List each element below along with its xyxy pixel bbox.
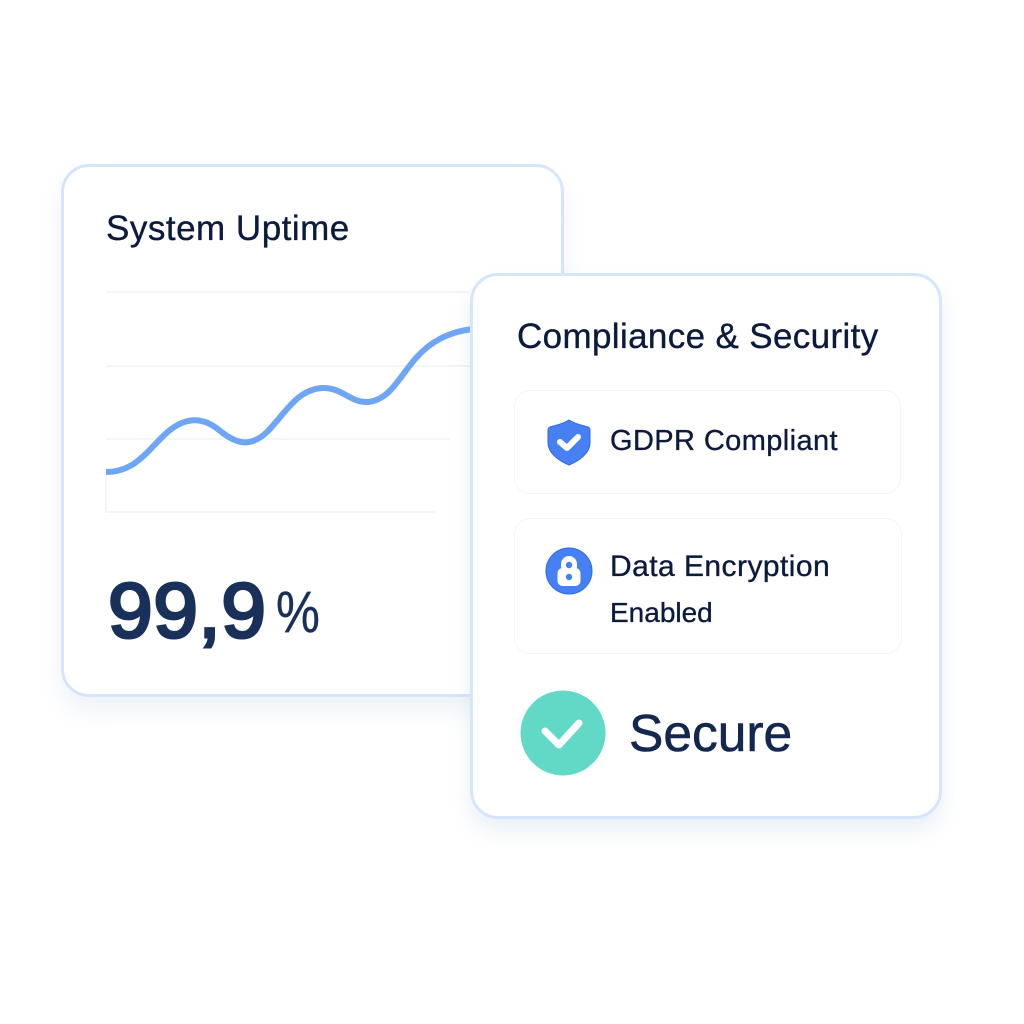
metric: uptime percentage: % — [276, 580, 320, 645]
heading: compliance and security: Compliance & Security — [517, 317, 879, 356]
label: data encryption: Data Encryption — [610, 550, 830, 583]
line chart: uptime trend — [105, 291, 470, 513]
panel: system uptime — [61, 164, 564, 697]
status: secure — [520, 690, 792, 776]
heading: system uptime: System Uptime — [106, 209, 350, 248]
label: secure: Secure — [629, 704, 792, 762]
metric: uptime percentage: 99,9 — [108, 566, 266, 654]
icon: padlock — [546, 548, 592, 594]
icon: shield check — [548, 420, 590, 466]
row: data encryption enabled — [514, 518, 902, 654]
row: GDPR compliant — [514, 390, 901, 494]
icon: teal check circle — [520, 690, 606, 776]
label: enabled: Enabled — [610, 597, 713, 628]
panel: compliance and security — [470, 273, 942, 819]
label: GDPR compliant: GDPR Compliant — [610, 425, 838, 457]
